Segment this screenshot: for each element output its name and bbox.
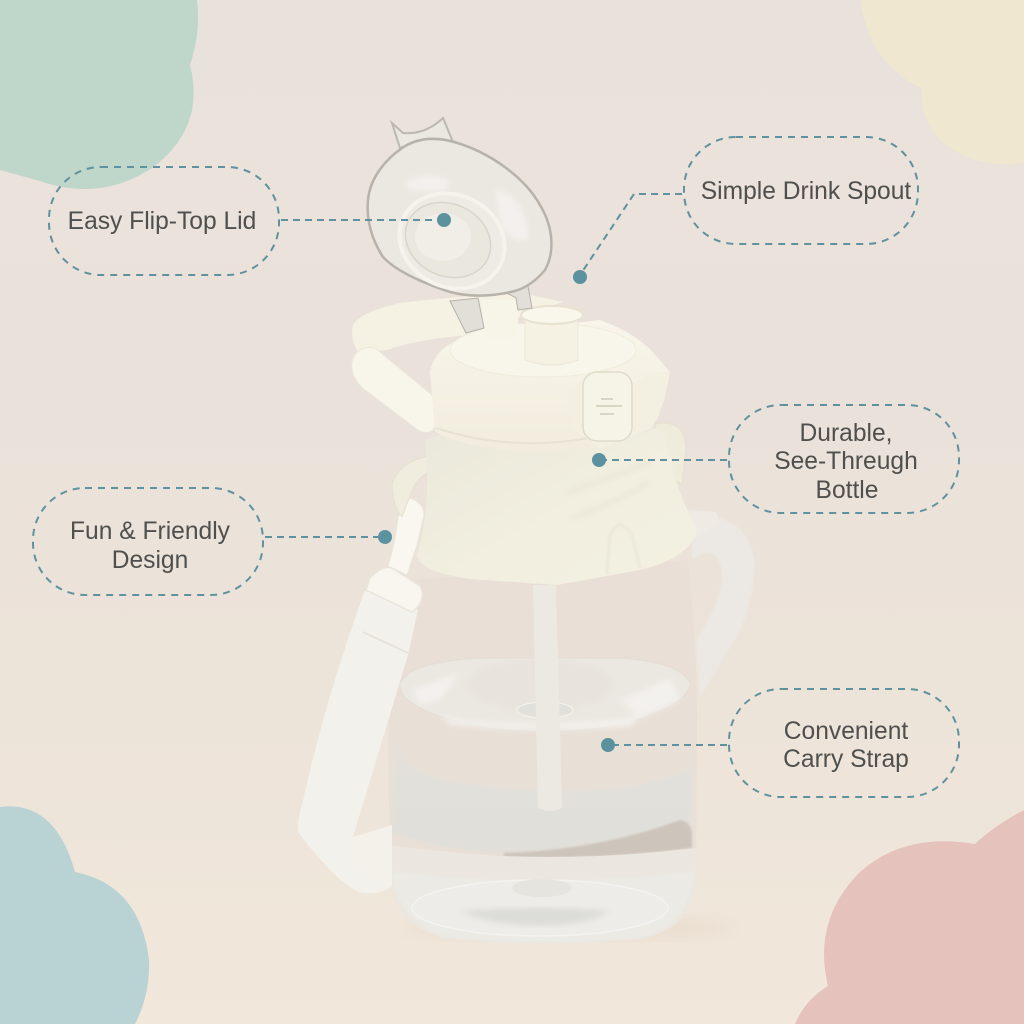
callout: Simple Drink Spout: Simple Drink Spout xyxy=(701,178,911,205)
callout: Durable, See-Through Bottle xyxy=(592,405,959,513)
water surface xyxy=(400,658,690,732)
callout: Durable, See-Through Bottle: See-Threugh xyxy=(774,448,918,475)
lid dome xyxy=(368,139,551,296)
water lower volume xyxy=(388,700,697,850)
front carry strap xyxy=(298,590,418,893)
left handle arm xyxy=(352,295,563,352)
flip-top lid clear xyxy=(368,118,551,306)
back strap arm behind bottle xyxy=(636,560,692,665)
hinge clear pieces xyxy=(450,286,532,333)
decorative cloud: bottom right pink xyxy=(795,810,1024,1024)
callout: Durable, See-Through Bottle: Bottle xyxy=(816,477,878,504)
strap stitching xyxy=(363,632,408,653)
lid center plug xyxy=(415,213,471,261)
left handle bar xyxy=(352,348,438,433)
collar xyxy=(417,428,697,585)
decorative cloud: top left green xyxy=(0,0,198,189)
lid top disc xyxy=(450,323,636,377)
collar side loop left xyxy=(392,455,440,517)
latch ridges xyxy=(596,399,622,414)
drink spout xyxy=(521,306,583,365)
hinge post xyxy=(482,300,518,338)
bottle base xyxy=(390,845,696,944)
callout: Easy Flip-Top Lid xyxy=(49,167,451,275)
strap buckle xyxy=(366,567,422,612)
lid body xyxy=(430,320,670,453)
collar notch xyxy=(607,525,640,574)
lid tab xyxy=(392,118,453,148)
callout: Convenient Carry Strap: Carry Strap xyxy=(783,746,909,773)
callout: Convenient Carry Strap: Convenient xyxy=(784,718,908,745)
strap hook right xyxy=(688,510,720,538)
collar embossed mark xyxy=(566,462,650,518)
callout: Easy Flip-Top Lid: Easy Flip-Top Lid xyxy=(68,208,256,235)
decorative cloud: bottom left blue xyxy=(0,806,149,1024)
callout: Fun & Friendly Design: Design xyxy=(112,547,188,574)
lid latch xyxy=(583,372,632,441)
decorative cloud: top right yellow xyxy=(860,0,1024,164)
lid seal ring xyxy=(384,176,520,306)
strap seen through water xyxy=(391,745,692,853)
callout: Fun & Friendly Design xyxy=(33,488,392,595)
callout: Fun & Friendly Design: Fun & Friendly xyxy=(70,518,231,545)
dome highlights xyxy=(405,175,528,241)
callout: Convenient Carry Strap xyxy=(601,689,959,797)
bottle shadow xyxy=(405,916,735,940)
lid right housing xyxy=(568,372,668,448)
illustration: water bottle xyxy=(298,118,755,944)
bottle body xyxy=(388,560,697,944)
base glass xyxy=(392,872,694,942)
callout: Simple Drink Spout xyxy=(573,137,918,284)
lid waist line xyxy=(436,420,655,443)
lid inner seal xyxy=(393,189,503,291)
shadow under inner strap xyxy=(503,820,692,858)
strap lower return xyxy=(340,825,392,893)
straw xyxy=(533,585,562,811)
back carry strap loop xyxy=(692,518,755,697)
callout: Durable, See-Through Bottle: Durable, xyxy=(800,420,892,447)
strap clip xyxy=(388,498,424,575)
collar side loop right xyxy=(655,423,686,485)
